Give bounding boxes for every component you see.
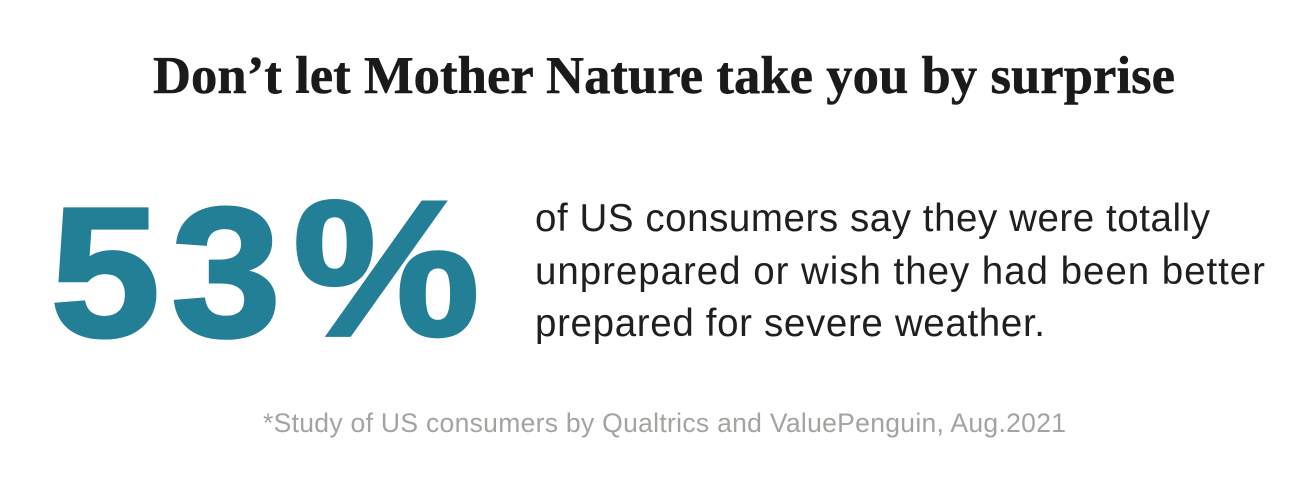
big statistic: 53%: 3: [171, 170, 281, 376]
description text: of US consumers say they were totally: [535, 197, 1211, 240]
big statistic: 53%: %: [293, 161, 480, 376]
big statistic: 53%: [50, 161, 480, 376]
description text: prepared for severe weather.: [535, 302, 1045, 345]
description text: unprepared or wish they had been better: [535, 250, 1265, 293]
title: Don’t let Mother Nature take you by surprise: [153, 47, 1175, 105]
description text: [535, 197, 1265, 345]
source footnote: *Study of US consumers by Qualtrics and ValuePenguin, Aug.2021: [263, 408, 1066, 438]
big statistic: 53%: 5: [50, 170, 160, 376]
